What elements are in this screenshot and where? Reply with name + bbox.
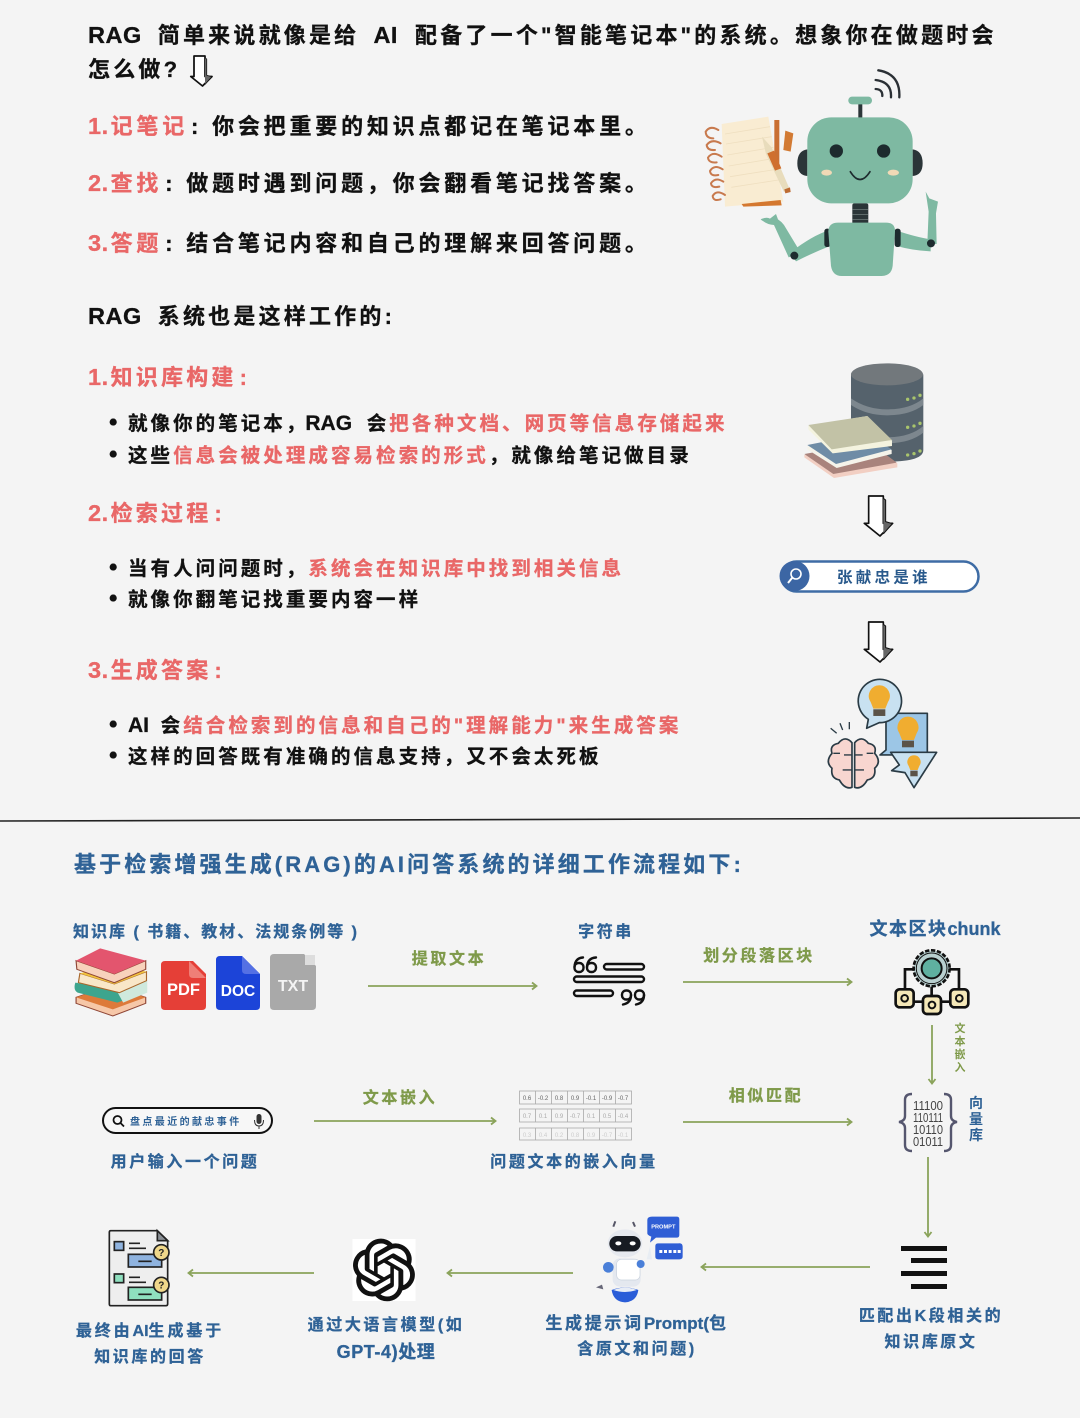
embedding vector table: -0.7 <box>618 1096 629 1102</box>
embedding vector table <box>520 1091 632 1140</box>
step 3 answer: 3.答题: 结合笔记内容和自己的理解来回答问题。 <box>88 230 651 256</box>
icon: OpenAI knot logo <box>352 1239 416 1301</box>
icon: vector store binary braces: 11100 <box>913 1098 943 1113</box>
icon: brain and light bulbs <box>828 679 937 788</box>
arrow: to final answer <box>188 1270 314 1276</box>
icon: PDF file: PDF <box>167 981 200 999</box>
icon: prompt robot <box>596 1217 683 1302</box>
label: final answer line 2: 知识库的回答 <box>94 1349 206 1366</box>
label: split chunks: 划分段落区块 <box>703 948 815 965</box>
intro heading: RAG 简单来说就像是给 AI 配备了一个"智能笔记本"的系统。想象你在做题时会 <box>88 22 997 48</box>
icon: vector store binary braces <box>899 1094 957 1151</box>
embedding vector table: 0.8 <box>555 1096 564 1102</box>
label: final answer line 1: 最终由AI生成基于 <box>76 1323 224 1340</box>
section 3 heading: 3.生成答案: <box>88 657 225 683</box>
embedding vector table: -0.7 <box>570 1114 581 1120</box>
arrow: question embedding <box>314 1118 496 1124</box>
embedding vector table: -0.2 <box>538 1096 549 1102</box>
label: user question: 用户输入一个问题 <box>111 1154 259 1171</box>
icon: vector store binary braces: 10110 <box>913 1122 943 1137</box>
section 2 heading: 2.检索过程: <box>88 500 225 526</box>
section 3 bullet 2: • <box>109 742 117 769</box>
icon: stack of books <box>75 948 147 1016</box>
embedding vector table: 0.3 <box>523 1133 532 1139</box>
arrow: down to answer <box>864 622 893 662</box>
arrow: split chunks <box>683 978 852 986</box>
label: top-k line 1: 匹配出K段相关的 <box>859 1308 1003 1325</box>
icon: vector store binary braces: 110111 <box>913 1110 943 1125</box>
section 1 bullet 1: 就像你的笔记本，RAG 会把各种文档、网页等信息存储起来 <box>128 412 728 435</box>
label: LLM line 1: 通过大语言模型(如 <box>308 1317 464 1334</box>
embedding vector table: 0.1 <box>539 1114 548 1120</box>
section 2 bullet 2: • <box>109 585 117 612</box>
search bar <box>780 561 978 592</box>
label: text embedding: 文本嵌入 <box>363 1090 437 1107</box>
arrow: embed chunks down <box>928 1025 936 1084</box>
icon: answer document: ? <box>158 1248 164 1259</box>
embedding vector table: 0.9 <box>555 1114 564 1120</box>
icon: answer document <box>109 1231 169 1306</box>
wifi signal <box>876 70 899 97</box>
arrow: similarity match <box>683 1118 852 1126</box>
label: prompt line 1: 生成提示词Prompt(包 <box>545 1314 729 1333</box>
arrow: extract text <box>368 982 536 990</box>
label: prompt line 2: 含原文和问题) <box>577 1341 697 1358</box>
search input box <box>103 1108 272 1133</box>
section 2 bullet 1: • <box>109 554 117 581</box>
section 1 bullet 2: 这些信息会被处理成容易检索的形式，就像给笔记做目录 <box>128 445 692 467</box>
search input box: 盘点最近的献忠事件 <box>130 1115 242 1128</box>
embedding vector table: 0.7 <box>523 1114 532 1120</box>
arrow: vector store down <box>924 1157 932 1236</box>
icon: TXT file <box>270 954 316 1010</box>
arrow: to prompt <box>702 1264 870 1270</box>
label: question embedding: 问题文本的嵌入向量 <box>490 1154 658 1171</box>
embedding vector table: 0.1 <box>587 1114 596 1120</box>
embedding vector table: 0.2 <box>555 1133 564 1139</box>
label: extract text: 提取文本 <box>412 951 486 968</box>
section 1 bullet 1: • <box>109 409 117 436</box>
embedding vector table: 0.6 <box>523 1096 532 1102</box>
embedding vector table: -0.9 <box>602 1096 613 1102</box>
icon: robot with notebook <box>706 70 938 276</box>
icon: database with books <box>804 363 923 478</box>
embedding vector table: 0.8 <box>571 1133 580 1139</box>
icon: TXT file: TXT <box>278 978 308 995</box>
icon: quote string <box>574 958 644 1004</box>
section 1 bullet 2: • <box>109 441 117 468</box>
icon: vector store binary braces: 01011 <box>913 1134 943 1149</box>
embedding vector table: 0.4 <box>539 1133 548 1139</box>
section 2 bullet 1: 当有人问问题时，系统会在知识库中找到相关信息 <box>128 558 624 580</box>
section 3 bullet 2: 这样的回答既有准确的信息支持，又不会太死板 <box>128 746 602 768</box>
arrow: to LLM <box>448 1270 573 1276</box>
embedding vector table: 0.9 <box>571 1096 580 1102</box>
icon: small down arrow <box>191 56 212 86</box>
label: knowledge base: 知识库 ( 书籍、教材、法规条例等 ) <box>73 924 359 941</box>
label: LLM line 2: GPT-4)处理 <box>337 1342 435 1362</box>
label: top-k line 2: 知识库原文 <box>884 1334 978 1351</box>
section 2 bullet 2: 就像你翻笔记找重要内容一样 <box>128 589 421 611</box>
embedding vector table: -0.7 <box>602 1133 613 1139</box>
search bar: 张献忠是谁 <box>837 568 931 586</box>
label: similarity match: 相似匹配 <box>729 1088 803 1105</box>
icon: answer document: ? <box>158 1281 164 1292</box>
workflow title: 基于检索增强生成(RAG)的AI问答系统的详细工作流程如下: <box>74 852 744 877</box>
label: text chunk: 文本区块chunk <box>869 919 1001 939</box>
icon: prompt robot: PROMPT <box>651 1224 676 1230</box>
icon: top-k list <box>901 1246 947 1289</box>
icon: PDF file <box>161 961 206 1010</box>
embedding vector table: 0.5 <box>603 1114 612 1120</box>
section 3 bullet 1: • <box>109 711 117 738</box>
section 3 bullet 1: AI 会结合检索到的信息和自己的"理解能力"来生成答案 <box>128 714 681 737</box>
intro heading second line: 怎么做? <box>88 57 180 82</box>
embedding vector table: -0.4 <box>618 1114 629 1120</box>
icon: chunk gear network <box>896 950 968 1014</box>
RAG system heading: RAG 系统也是这样工作的: <box>88 303 395 329</box>
label: string: 字符串 <box>578 924 634 941</box>
label: text embedding vertical: 文本嵌入 <box>954 1023 966 1074</box>
embedding vector table: -0.1 <box>586 1096 597 1102</box>
icon: DOC file <box>216 956 260 1010</box>
label: vector store vertical: 向量库 <box>969 1095 983 1143</box>
arrow: down to search <box>864 496 893 536</box>
embedding vector table: -0.1 <box>618 1133 629 1139</box>
step 2 look up: 2.查找: 做题时遇到问题，你会翻看笔记找答案。 <box>88 170 651 196</box>
embedding vector table: 0.9 <box>587 1133 596 1139</box>
section 1 heading: 1.知识库构建: <box>88 364 250 390</box>
notebook <box>722 117 783 207</box>
step 1 take notes: 1.记笔记: 你会把重要的知识点都记在笔记本里。 <box>88 113 651 139</box>
icon: DOC file: DOC <box>221 983 255 1000</box>
